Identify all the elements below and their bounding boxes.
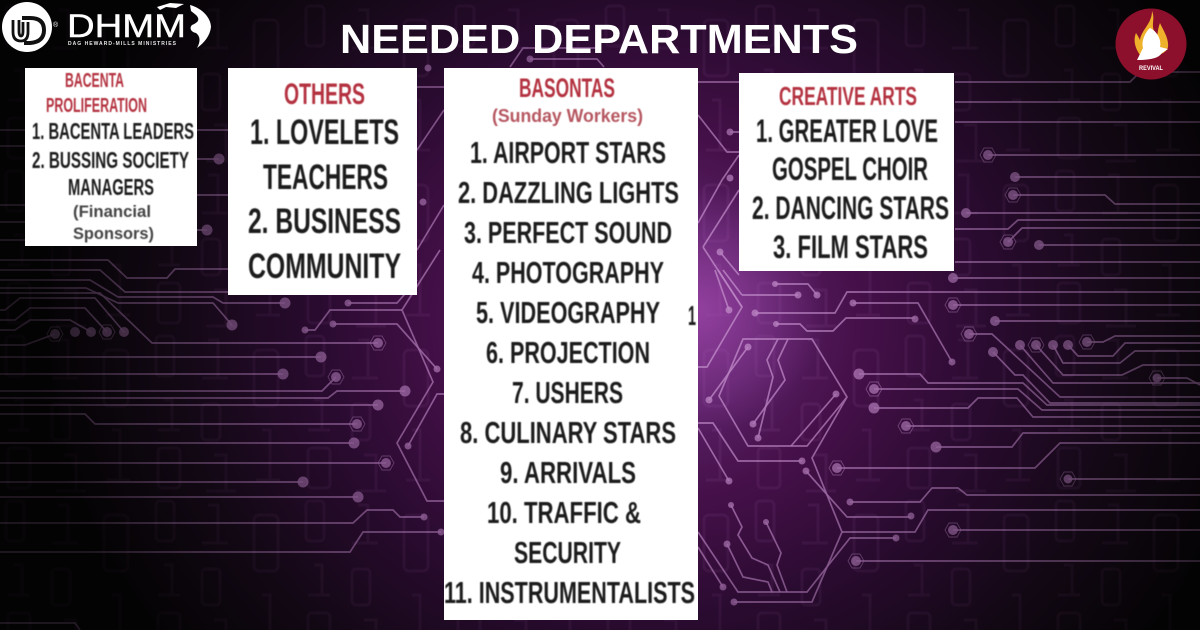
Revival wordmark: REVIVAL (1139, 65, 1163, 72)
list: Basontas departments: 11. INSTRUMENTALISTS (444, 575, 695, 610)
list: Basontas departments: 8. CULINARY STARS (460, 415, 676, 450)
list: Bacenta departments: Sponsors) (73, 224, 154, 243)
heading: Bacenta Proliferation: PROLIFERATION (46, 95, 147, 117)
list: Basontas departments: 5. VIDEOGRAPHY (476, 295, 660, 330)
logo: Revival (1116, 8, 1186, 80)
icon: flame (1135, 11, 1168, 56)
heading: Bacenta Proliferation (46, 70, 147, 117)
list: Basontas departments: 3. PERFECT SOUND (464, 215, 672, 250)
list: Bacenta departments (32, 118, 194, 243)
logo: DHMM (2, 2, 211, 52)
list: Creative Arts departments: GOSPEL CHOIR (772, 151, 928, 187)
heading: Bacenta Proliferation: BACENTA (65, 70, 124, 92)
registered mark: ® (53, 21, 59, 29)
panel: Creative Arts (739, 73, 954, 271)
panel: Basontas (444, 68, 698, 620)
stray numeral: 1 (688, 300, 696, 331)
list: Basontas departments: 9. ARRIVALS (500, 455, 636, 490)
title: NEEDED DEPARTMENTS (340, 16, 858, 62)
DHMM wordmark: DHMM (67, 8, 186, 44)
list: Creative Arts departments (752, 113, 949, 265)
list: Others departments: 1. LOVELETS (250, 113, 399, 152)
panel: Bacenta Proliferation (25, 68, 197, 246)
list: Basontas departments: SECURITY (514, 535, 621, 570)
list: Basontas departments (444, 135, 695, 610)
list: Basontas departments: 2. DAZZLING LIGHTS (458, 175, 679, 210)
panel: Others (228, 68, 417, 295)
heading: Basontas: (Sunday Workers) (492, 106, 643, 126)
list: Others departments: 2. BUSINESS (248, 202, 401, 241)
list: Basontas departments: 1. AIRPORT STARS (470, 135, 666, 170)
list: Bacenta departments: MANAGERS (68, 174, 154, 200)
ministry name: DAG HEWARD-MILLS MINISTRIES (68, 41, 177, 47)
icon: globe (157, 3, 211, 48)
icon: UD round badge (2, 2, 52, 52)
list: Basontas departments: 6. PROJECTION (486, 335, 650, 370)
list: Basontas departments: 10. TRAFFIC & (487, 495, 641, 530)
heading: Basontas (492, 73, 643, 126)
list: Bacenta departments: 2. BUSSING SOCIETY (32, 147, 189, 173)
list: Bacenta departments: (Financial (73, 202, 151, 221)
circuit hexagon rings (47, 148, 1165, 568)
heading: Others: OTHERS (284, 78, 365, 111)
list: Creative Arts departments: 2. DANCING STARS (752, 190, 949, 226)
icon: dove (1137, 28, 1168, 60)
list: Others departments: COMMUNITY (248, 247, 401, 286)
list: Basontas departments: 4. PHOTOGRAPHY (472, 255, 664, 290)
list: Others departments (248, 113, 401, 286)
list: Basontas departments: 7. USHERS (512, 375, 623, 410)
list: Others departments: TEACHERS (263, 158, 388, 197)
heading: Basontas: BASONTAS (519, 73, 615, 103)
list: Bacenta departments: 1. BACENTA LEADERS (32, 118, 194, 144)
list: Creative Arts departments: 1. GREATER LOVE (756, 113, 938, 149)
heading: Creative Arts: CREATIVE ARTS (779, 81, 917, 111)
list: Creative Arts departments: 3. FILM STARS (773, 229, 928, 265)
